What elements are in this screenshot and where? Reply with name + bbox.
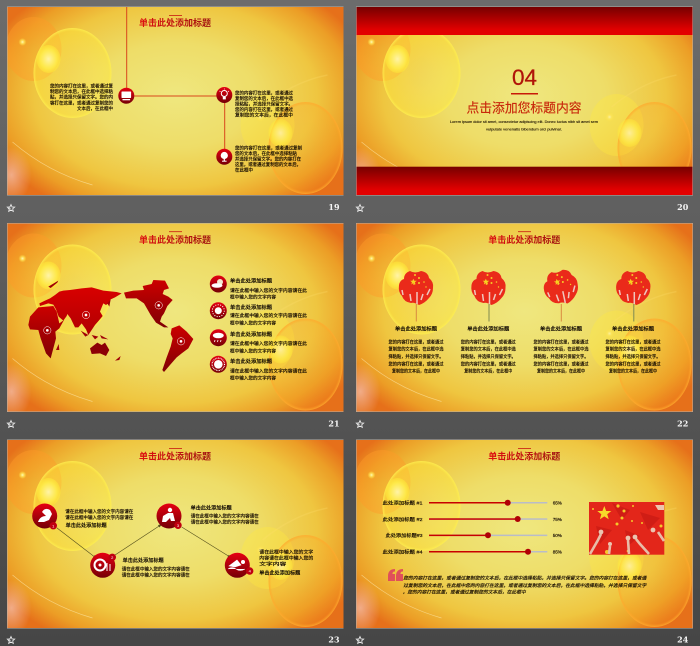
footer: slide 22: 22 bbox=[677, 418, 688, 428]
column 1: 复制您的文本后，在此框中 bbox=[392, 368, 440, 375]
text block: right bottom bbox=[235, 144, 302, 174]
step 4 text bbox=[259, 549, 314, 577]
title: 单击此处添加标题 bbox=[139, 17, 211, 28]
step 1 text: 请在此框中输入您的文字内容请在 bbox=[65, 514, 134, 521]
footer: slide 19: 19 bbox=[328, 202, 340, 212]
legend item 1: cloud and sun: 框中输入您的文字内容 bbox=[230, 293, 276, 300]
text block: right top: 复制您的文本后，在此框中 bbox=[235, 111, 293, 118]
legend item 3: rain cloud: 框中输入您的文字内容 bbox=[230, 347, 276, 354]
footer: slide 24: 24 bbox=[677, 634, 689, 644]
top red band bbox=[356, 7, 692, 35]
column 1 bbox=[388, 271, 444, 375]
text block: right bottom: 在此框中 bbox=[235, 166, 253, 174]
text block: right top: 您的内容打在这里，或者通过 bbox=[235, 89, 293, 96]
icon: monitor bbox=[118, 88, 134, 104]
title: 单击此处添加标题 bbox=[139, 450, 211, 462]
column 4: 复制您的文本后，在此框中 bbox=[609, 368, 657, 375]
bar row 4: 85% bbox=[553, 550, 562, 554]
legend item 4: bright sun: 框中输入您的文字内容 bbox=[230, 374, 276, 381]
divider line bbox=[511, 93, 538, 94]
column 4: 单击此处添加标题 bbox=[612, 326, 654, 332]
text block: right bottom: 并选择只保留文字。您的内容打在 bbox=[235, 156, 301, 163]
step 4 text: 内容请在此框中输入您的 bbox=[259, 555, 314, 562]
bar row 2: 此处添加标题 #2 bbox=[382, 516, 423, 523]
column 4: 您的内容打在这里，或者通过 bbox=[606, 338, 661, 345]
legend item 4: bright sun bbox=[210, 356, 307, 381]
panel: slide 22 four flag columns bbox=[340, 223, 693, 420]
footer: slide 24 bbox=[356, 634, 689, 644]
subtitle text: Lorem ipsum dolor sit amet, consectetur adipiscing elit. Donec luctus nibh sit amet sem bbox=[450, 120, 598, 124]
column 2: 择粘贴，并选择只保留文字。 bbox=[461, 353, 516, 360]
step 1 node: 1 bbox=[52, 523, 55, 528]
column 1: 择粘贴，并选择只保留文字。 bbox=[388, 353, 444, 360]
step 2 text: 请在此框中输入您的文字内容请在 bbox=[122, 571, 190, 578]
column 2 bbox=[461, 271, 516, 375]
bar row 1: 65% bbox=[553, 500, 562, 506]
footer: slide 20: 20 bbox=[677, 202, 689, 212]
column 2: 您的内容打在这里，或者通过 bbox=[461, 360, 516, 367]
footer: slide 19 bbox=[7, 202, 340, 212]
quote text bbox=[403, 575, 648, 595]
connector lines bbox=[127, 7, 225, 155]
column 3: 复制您的文本后，在此框中 bbox=[537, 368, 585, 375]
text block: left bbox=[50, 82, 113, 112]
footer: slide 23: 23 bbox=[328, 634, 340, 644]
bar row 4: 此处添加标题 #4 bbox=[382, 548, 423, 556]
legend item 1: cloud and sun: 单击此处添加标题 bbox=[230, 277, 272, 284]
flag photo with raised hands bbox=[589, 502, 664, 555]
footer: slide 20 bbox=[356, 202, 689, 212]
step 2 text bbox=[122, 557, 190, 578]
column 4: 您的内容打在这里，或者通过 bbox=[606, 360, 661, 367]
column 2: 单击此处添加标题 bbox=[467, 326, 509, 332]
step 4 text: 单击此处添加标题 bbox=[259, 570, 300, 577]
text block: left: 制您的文本后，在此框中选择粘 bbox=[50, 88, 113, 95]
legend item 2: sun: 单击此处添加标题 bbox=[230, 304, 272, 311]
panel: slide 20 section divider bbox=[340, 6, 693, 203]
bar row 3: 50% bbox=[553, 533, 562, 538]
title: 单击此处添加标题 bbox=[488, 450, 560, 462]
text block: right top: 您的内容打在这里，或者通过 bbox=[235, 106, 293, 113]
icon: globe bbox=[216, 149, 232, 165]
column 3: 单击此处添加标题 bbox=[540, 326, 582, 332]
panel: slide 23 zigzag process bbox=[0, 440, 344, 636]
text block: right top: 择粘贴，并选择只保留文字。 bbox=[235, 101, 293, 108]
text block: left: 文本后，在此框中 bbox=[77, 105, 113, 112]
column 4: 复制您的文本后，在此框中选 bbox=[606, 346, 661, 353]
legend item 2: sun: 请在此框中输入您的文字内容请在此 bbox=[230, 312, 307, 319]
legend item 2: sun: 框中输入您的文字内容 bbox=[230, 319, 276, 326]
column 2: 您的内容打在这里，或者通过 bbox=[461, 338, 516, 345]
text block: left: 容打在这里，或者通过复制您的 bbox=[50, 99, 113, 106]
subtitle text bbox=[450, 120, 598, 132]
step 4 text: 请在此框中输入您的文字 bbox=[259, 549, 314, 556]
footer: slide 23 bbox=[7, 634, 340, 644]
step 3 text: 请在此框中输入您的文字内容请在 bbox=[191, 518, 259, 525]
text block: right bottom: 您的文本后，在此框中选择粘贴 bbox=[235, 150, 297, 157]
column 3: 您的内容打在这里，或者通过 bbox=[534, 360, 589, 367]
quote text: 过复制您的文本后，在此框中您的内容打在这里，或者通过复制您的文本后，在此框中选择粘贴，并选择只保留文字 bbox=[403, 583, 648, 588]
column 4: 择粘贴，并选择只保留文字。 bbox=[606, 353, 660, 360]
quote mark bbox=[388, 569, 403, 581]
bar row 2 bbox=[382, 516, 562, 523]
icon: light bulb bbox=[216, 87, 232, 103]
column 3: 您的内容打在这里，或者通过 bbox=[534, 338, 589, 345]
arrows bbox=[57, 524, 231, 558]
legend item 1: cloud and sun: 请在此框中输入您的文字内容请在此 bbox=[230, 287, 307, 294]
column 1: 单击此处添加标题 bbox=[395, 326, 437, 332]
world map bbox=[28, 280, 193, 372]
column 1: 您的内容打在这里，或者通过 bbox=[388, 360, 444, 367]
text block: right top: 复制您的文本后，在此框中选 bbox=[235, 95, 293, 102]
bottom red band bbox=[356, 167, 692, 195]
step 4 node: 4 bbox=[249, 569, 252, 574]
bar row 2: 75% bbox=[553, 517, 562, 522]
column 3: 复制您的文本后，在此框中选 bbox=[534, 346, 589, 353]
legend item 4: bright sun: 单击此处添加标题 bbox=[230, 358, 272, 365]
footer: slide 21: 21 bbox=[328, 418, 340, 428]
quote text: 您的内容打在这里，或者通过复制您的文本后，在此框中选择粘贴，并选择只保留文字。您的内容打在这里，或者通 bbox=[403, 575, 648, 580]
bar row 1: 此处添加标题 #1 bbox=[382, 500, 423, 506]
column 3 bbox=[534, 267, 589, 375]
step 4 text: 文字内容 bbox=[259, 561, 287, 568]
legend item 4: bright sun: 请在此框中输入您的文字内容请在此 bbox=[230, 367, 307, 374]
step 1 text: 请在此框中输入您的文字内容请在 bbox=[65, 508, 134, 515]
step 2 node bbox=[90, 553, 116, 578]
column 1: 您的内容打在这里，或者通过 bbox=[388, 338, 444, 345]
footer: slide 21 bbox=[7, 418, 340, 428]
step 4 node bbox=[225, 553, 253, 578]
step 3 text: 单击此处添加标题 bbox=[191, 504, 232, 511]
quote text: ，您的内容打在这里，或者通过复制您的文本后，在此框中 bbox=[403, 590, 526, 595]
text block: right bottom: 您的内容打在这里，或者通过复制 bbox=[235, 144, 302, 151]
step 1 text bbox=[65, 508, 134, 529]
column 2: 复制您的文本后，在此框中 bbox=[464, 368, 513, 375]
text block: right top bbox=[235, 89, 293, 118]
column 1: 复制您的文本后，在此框中选 bbox=[388, 346, 444, 353]
legend item 1: cloud and sun bbox=[210, 276, 307, 300]
column 3: 择粘贴，并选择只保留文字。 bbox=[534, 353, 588, 360]
title: 单击此处添加标题 bbox=[488, 234, 560, 245]
step 3 text bbox=[191, 504, 259, 525]
legend item 3: rain cloud: 请在此框中输入您的文字内容请在此 bbox=[230, 340, 307, 347]
bar row 3 bbox=[386, 532, 562, 539]
column 4 bbox=[606, 271, 661, 375]
step 2 node: 2 bbox=[111, 555, 114, 560]
step 3 text: 请在此框中输入您的文字内容请在 bbox=[191, 513, 259, 520]
bar row 3: 此处添加标题#3 bbox=[386, 532, 423, 539]
column 2: 复制您的文本后，在此框中选 bbox=[461, 346, 516, 353]
step 3 node bbox=[156, 504, 182, 529]
footer: slide 22 bbox=[356, 418, 688, 428]
bar row 4 bbox=[382, 548, 562, 556]
panel: slide 21 world map bbox=[0, 223, 344, 420]
step 1 text: 单击此处添加标题 bbox=[66, 522, 107, 529]
step 2 text: 请在此框中输入您的文字内容请在 bbox=[122, 565, 190, 572]
text block: right bottom: 这里，或者通过复制您的文本后， bbox=[235, 161, 301, 168]
text block: left: 贴，并选择只保留文字。您的内 bbox=[50, 94, 113, 101]
legend item 3: rain cloud bbox=[210, 329, 307, 354]
panel: slide 19 timeline bbox=[0, 6, 344, 203]
step 3 node: 3 bbox=[177, 523, 180, 528]
section number: 04 bbox=[512, 65, 537, 90]
bar row 1 bbox=[382, 500, 562, 506]
subtitle text: vulputate venenatis bibendum orci pulvinar. bbox=[486, 128, 562, 132]
legend item 2: sun bbox=[210, 302, 307, 326]
text block: left: 您的内容打在这里，或者通过复 bbox=[50, 82, 113, 89]
section title: 点击添加您标题内容 bbox=[466, 100, 582, 116]
step 1 node bbox=[32, 504, 57, 529]
legend item 3: rain cloud: 单击此处添加标题 bbox=[230, 331, 272, 338]
title: 单击此处添加标题 bbox=[139, 234, 211, 245]
step 2 text: 单击此处添加标题 bbox=[123, 557, 164, 564]
panel: slide 24 progress bars bbox=[340, 440, 693, 636]
